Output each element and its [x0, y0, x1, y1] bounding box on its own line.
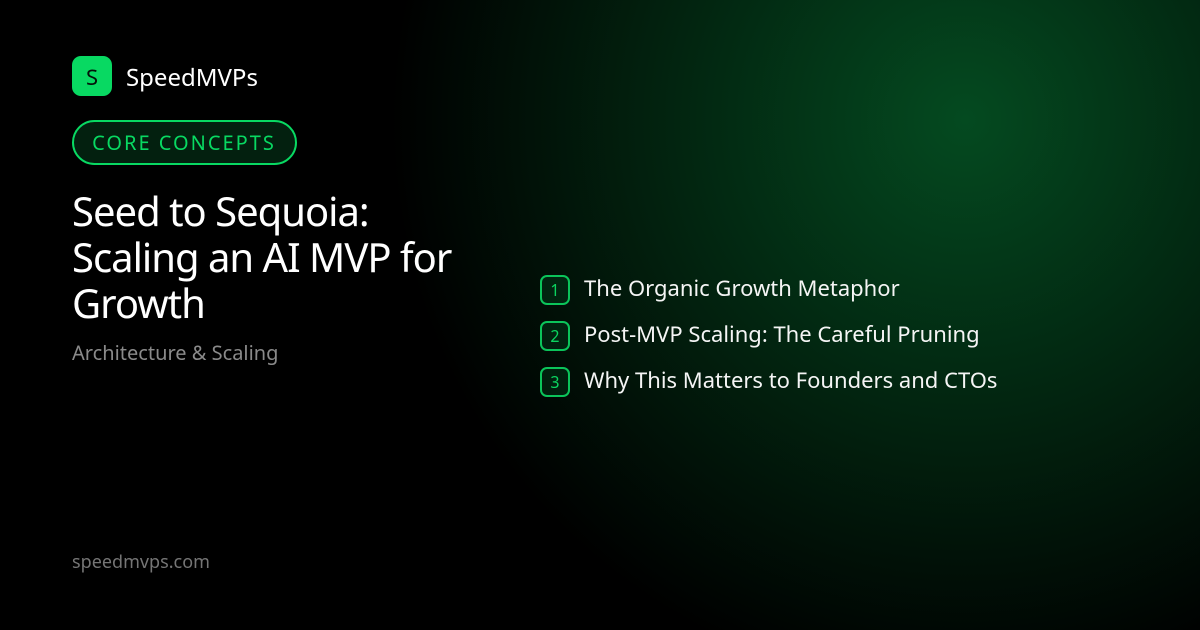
title: Scaling an AI MVP for: [72, 229, 451, 284]
subtitle: Architecture & Scaling: [72, 339, 278, 366]
number 1: 1: [550, 279, 560, 301]
topic 3: Why This Matters to Founders and CTOs: [584, 365, 997, 395]
title: [72, 183, 452, 330]
number 1: [540, 275, 570, 305]
number 3: 3: [550, 371, 560, 393]
category pill: CORE CONCEPTS: [92, 129, 276, 156]
title: Seed to Sequoia:: [72, 183, 369, 238]
logo badge: [72, 56, 112, 96]
footer url: speedmvps.com: [72, 550, 210, 574]
logo badge: S: [86, 62, 98, 92]
title: Growth: [72, 275, 205, 330]
number 2: 2: [550, 325, 560, 347]
category pill: [72, 120, 297, 165]
brand name: SpeedMVPs: [126, 61, 258, 94]
topic 1: The Organic Growth Metaphor: [584, 273, 900, 303]
topic 2: Post-MVP Scaling: The Careful Pruning: [584, 319, 980, 349]
number 3: [540, 367, 570, 397]
number 2: [540, 321, 570, 351]
